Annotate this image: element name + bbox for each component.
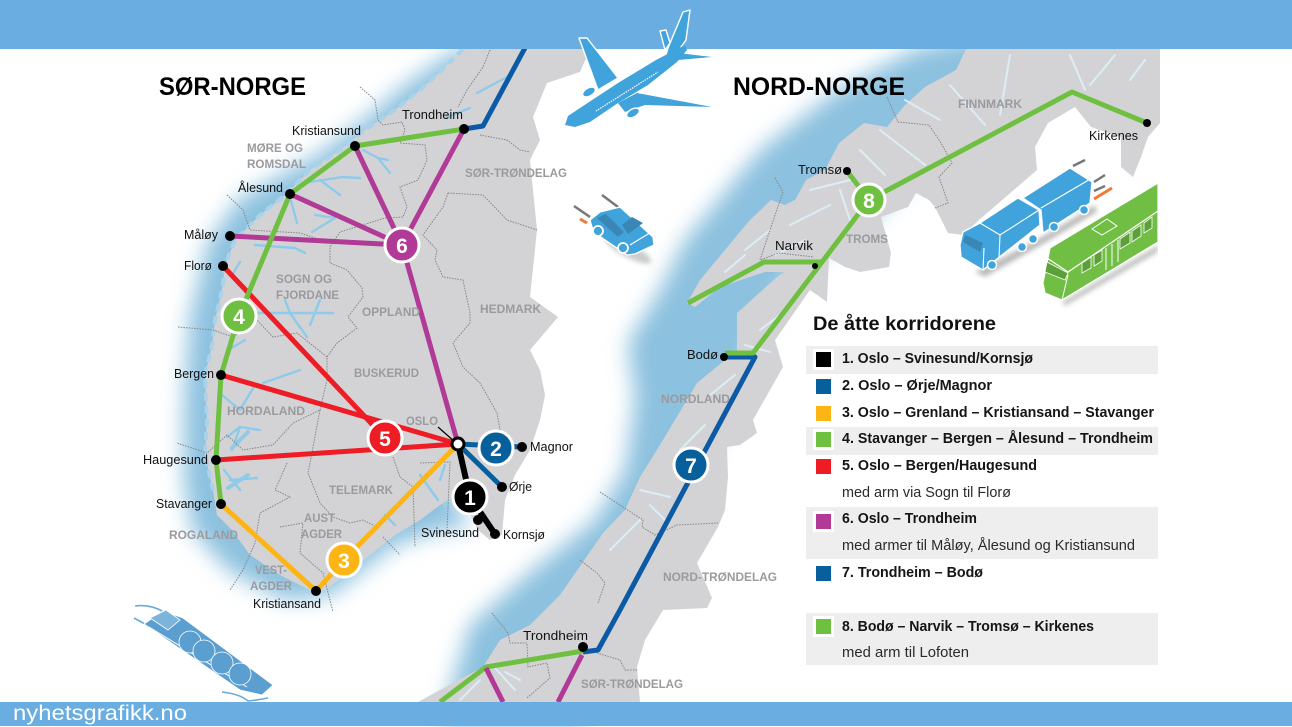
county borders: north [492, 97, 952, 698]
badge 7 [674, 448, 708, 482]
city labels: Narvik [775, 239, 814, 253]
legend row 5: med arm via Sogn til Florø [842, 485, 1011, 501]
city labels: Kristiansand [253, 597, 321, 611]
corridor 6 lines [230, 129, 464, 444]
region labels: TELEMARK [329, 483, 393, 497]
badge 8: 8 [863, 190, 875, 213]
region labels: AUST [304, 511, 336, 525]
badge 4: 4 [233, 306, 245, 329]
region labels: NORD-TRØNDELAG [663, 570, 777, 584]
region labels: FINNMARK [958, 97, 1022, 111]
region labels: OPPLAND [362, 305, 420, 319]
badge 2 [479, 431, 513, 465]
badge 5 [368, 421, 402, 455]
legend panel [806, 314, 1158, 665]
land: Troms, Finnmark and Lofoten [687, 49, 1160, 307]
legend row 6: 6. Oslo – Trondheim [842, 511, 977, 527]
city labels: Bergen [174, 367, 214, 381]
badge 5: 5 [379, 428, 391, 451]
sea glow: north coast [432, 49, 966, 727]
city labels: Tromsø [798, 163, 842, 177]
corridor 5 lines [216, 266, 458, 460]
legend row 8: med arm til Lofoten [842, 645, 969, 661]
legend row 5 [816, 458, 1037, 501]
city labels: Bodø [687, 348, 718, 362]
map: southern Norway [177, 40, 590, 612]
fjords: north [460, 55, 1145, 700]
legend row 6: med armer til Måløy, Ålesund og Kristiansund [842, 537, 1135, 554]
land: south Norway [205, 49, 590, 590]
badge 7: 7 [685, 455, 697, 478]
city labels [143, 108, 1138, 643]
city labels: Haugesund [143, 453, 208, 467]
city labels: Svinesund [421, 526, 479, 540]
region labels: MØRE OG [247, 141, 303, 155]
city labels: Trondheim [402, 108, 463, 122]
Oslo marker and leader [438, 427, 466, 452]
city labels: Kristiansund [292, 124, 361, 138]
legend row 4: 4. Stavanger – Bergen – Ålesund – Trondheim [842, 430, 1153, 447]
badge 1 [453, 480, 487, 514]
legend row 3: 3. Oslo – Grenland – Kristiansand – Stavanger [842, 405, 1154, 421]
bottom banner [0, 702, 1292, 726]
region labels: NORDLAND [661, 392, 730, 406]
corridor badges [222, 184, 885, 577]
icon: car [574, 195, 654, 268]
city labels: Kornsjø [503, 528, 545, 542]
fjords: south [222, 77, 507, 525]
legend row 8: 8. Bodø – Narvik – Tromsø – Kirkenes [842, 619, 1094, 635]
county borders: south [177, 50, 537, 612]
legend row 5: 5. Oslo – Bergen/Haugesund [842, 458, 1037, 474]
city labels: Ålesund [238, 180, 283, 195]
legend row 4 [806, 427, 1158, 455]
legend row 2: 2. Oslo – Ørje/Magnor [842, 378, 992, 394]
heading: south: SØR-NORGE [159, 73, 306, 101]
region labels: TROMS [846, 232, 888, 246]
city labels: Trondheim [523, 629, 588, 643]
corridor 4 line [216, 129, 464, 504]
region labels: SOGN OG [276, 272, 332, 286]
badge 1: 1 [464, 487, 476, 510]
legend title: De åtte korridorene [813, 314, 996, 335]
lower map lines: corridor 4 and 6 [440, 651, 583, 702]
legend row 1 [806, 346, 1158, 374]
top banner [0, 0, 1292, 49]
corridor 1 line [458, 444, 495, 534]
icon: truck [960, 160, 1112, 277]
region labels: AGDER [301, 527, 342, 541]
corridor 8 line [688, 92, 1147, 353]
region labels: AGDER [250, 579, 292, 593]
region labels: SØR-TRØNDELAG [581, 677, 683, 691]
region labels: HORDALAND [227, 404, 305, 418]
city labels: Stavanger [156, 497, 212, 511]
badge 3 [327, 543, 361, 577]
badge 3: 3 [338, 550, 350, 573]
badge 4 [222, 299, 256, 333]
region labels: OSLO [406, 414, 438, 428]
legend row 6 [806, 507, 1158, 559]
legend row 7: 7. Trondheim – Bodø [842, 565, 983, 581]
badge 6: 6 [396, 235, 408, 258]
region labels: FJORDANE [276, 288, 339, 302]
city labels: Ørje [509, 480, 532, 494]
region labels: VEST- [255, 563, 287, 577]
corridor 7 north segment [464, 46, 526, 129]
region labels: BUSKERUD [354, 366, 419, 380]
corridor 3 line [221, 444, 458, 591]
city labels: Florø [184, 259, 212, 273]
map: northern Norway [418, 30, 1175, 725]
sea glow: south coast [184, 40, 470, 600]
corridor lines: north map [440, 92, 1147, 702]
badge 2: 2 [490, 438, 502, 461]
city labels: Magnor [530, 440, 573, 454]
website credit: nyhetsgrafikk.no [13, 702, 187, 725]
badge 6 [385, 228, 419, 262]
badge 8 [853, 184, 885, 216]
region labels: ROGALAND [169, 528, 238, 542]
region labels: HEDMARK [480, 302, 541, 316]
land: Nordland and Trøndelag [418, 262, 810, 702]
city labels: Kirkenes [1089, 129, 1138, 143]
corridor lines: south map [216, 46, 526, 591]
corridor 7 line [583, 357, 755, 652]
corridor 2 lines [458, 444, 522, 487]
icon: ship [134, 606, 273, 701]
city labels: Måløy [184, 228, 219, 242]
region labels: ROMSDAL [247, 157, 306, 171]
legend row 8 [806, 613, 1158, 665]
region labels [169, 97, 1022, 691]
icon: train [1043, 183, 1158, 306]
icon: airplane [565, 10, 712, 127]
west coast fragments [205, 49, 463, 490]
legend row 1: 1. Oslo – Svinesund/Kornsjø [842, 351, 1033, 367]
heading: north: NORD-NORGE [733, 73, 905, 101]
region labels: SØR-TRØNDELAG [465, 166, 567, 180]
city dots [211, 119, 1151, 652]
